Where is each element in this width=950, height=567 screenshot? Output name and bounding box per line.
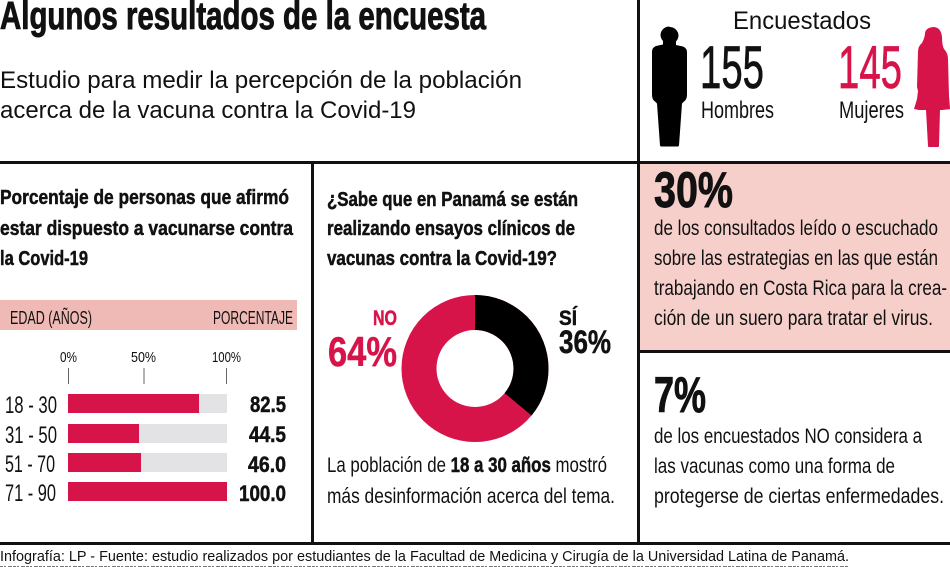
text: 7% description: las vacunas como una forma de: [654, 455, 895, 478]
panel: 7 percent: [654, 367, 944, 508]
age labels: 71 - 90: [5, 480, 56, 507]
table header band: [0, 300, 297, 330]
women label: Mujeres: [839, 97, 904, 124]
age labels: 18 - 30: [5, 392, 57, 419]
label: yes: 36%: [559, 324, 611, 360]
stat: 7%: 7%: [654, 367, 706, 423]
heading: clinical trials: ¿Sabe que en Panamá se están: [327, 189, 578, 211]
bar chart: [5, 349, 286, 507]
men count: 155: [700, 34, 764, 101]
table header band: PORCENTAJE: [213, 308, 293, 328]
axis: 0%: [60, 349, 77, 366]
panel: clinical trials awareness: [327, 189, 615, 508]
heading: respondents: Encuestados: [733, 7, 871, 35]
note: [327, 454, 615, 508]
age labels: 31 - 50: [5, 422, 57, 449]
label: no: [328, 307, 397, 375]
heading: willingness: [0, 187, 294, 270]
label: yes: [559, 307, 611, 360]
axis: 100%: [212, 349, 241, 366]
label: yes: SÍ: [559, 307, 578, 330]
subtitle: acerca de la vacuna contra la Covid-19: [0, 97, 416, 124]
label: no: 64%: [328, 328, 397, 375]
panel: 30 percent: [654, 162, 947, 330]
values: [239, 392, 286, 506]
values: 44.5: [249, 422, 286, 447]
heading: clinical trials: [327, 189, 578, 270]
text: 7% description: [654, 425, 944, 508]
bar fills: [68, 394, 227, 501]
heading: willingness: Porcentaje de personas que afirmó: [0, 187, 289, 209]
heading: willingness: estar dispuesto a vacunarse contra: [0, 218, 294, 240]
heading: willingness: la Covid-19: [0, 248, 88, 270]
values: 100.0: [239, 481, 286, 506]
text: 30% description: [654, 217, 947, 330]
footer credit: Infografía: LP - Fuente: estudio realizados por estudiantes de la Facultad de Medicina y Cirugía de la Universidad Latina de Panamá.: [0, 548, 849, 565]
label: no: NO: [373, 307, 397, 330]
values: 82.5: [250, 392, 286, 417]
donut chart: [419, 312, 531, 424]
note: La población de 18 a 30 años mostró: [327, 454, 607, 477]
women count: 145: [838, 34, 902, 101]
subtitle: Estudio para medir la percepción de la población: [0, 67, 522, 94]
panel: willingness to vaccinate: [0, 187, 297, 507]
note: más desinformación acerca del tema.: [327, 485, 615, 508]
heading: clinical trials: vacunas contra la Covid-19?: [327, 248, 557, 270]
icon: woman silhouette: [914, 27, 950, 147]
stat: 30%: 30%: [654, 162, 733, 218]
values: 46.0: [248, 452, 286, 477]
axis: [60, 349, 241, 384]
heading: clinical trials: realizando ensayos clínicos de: [327, 218, 575, 240]
age labels: [5, 392, 57, 507]
men label: Hombres: [701, 97, 774, 124]
subtitle: [0, 67, 522, 124]
panel: respondents: [652, 7, 950, 147]
axis: 50%: [131, 349, 156, 366]
panel: pink highlight background: [640, 164, 950, 351]
icon: man silhouette: [652, 26, 687, 146]
bar tracks: [68, 394, 227, 472]
table header band: EDAD (AÑOS): [10, 307, 92, 328]
age labels: 51 - 70: [5, 451, 55, 478]
